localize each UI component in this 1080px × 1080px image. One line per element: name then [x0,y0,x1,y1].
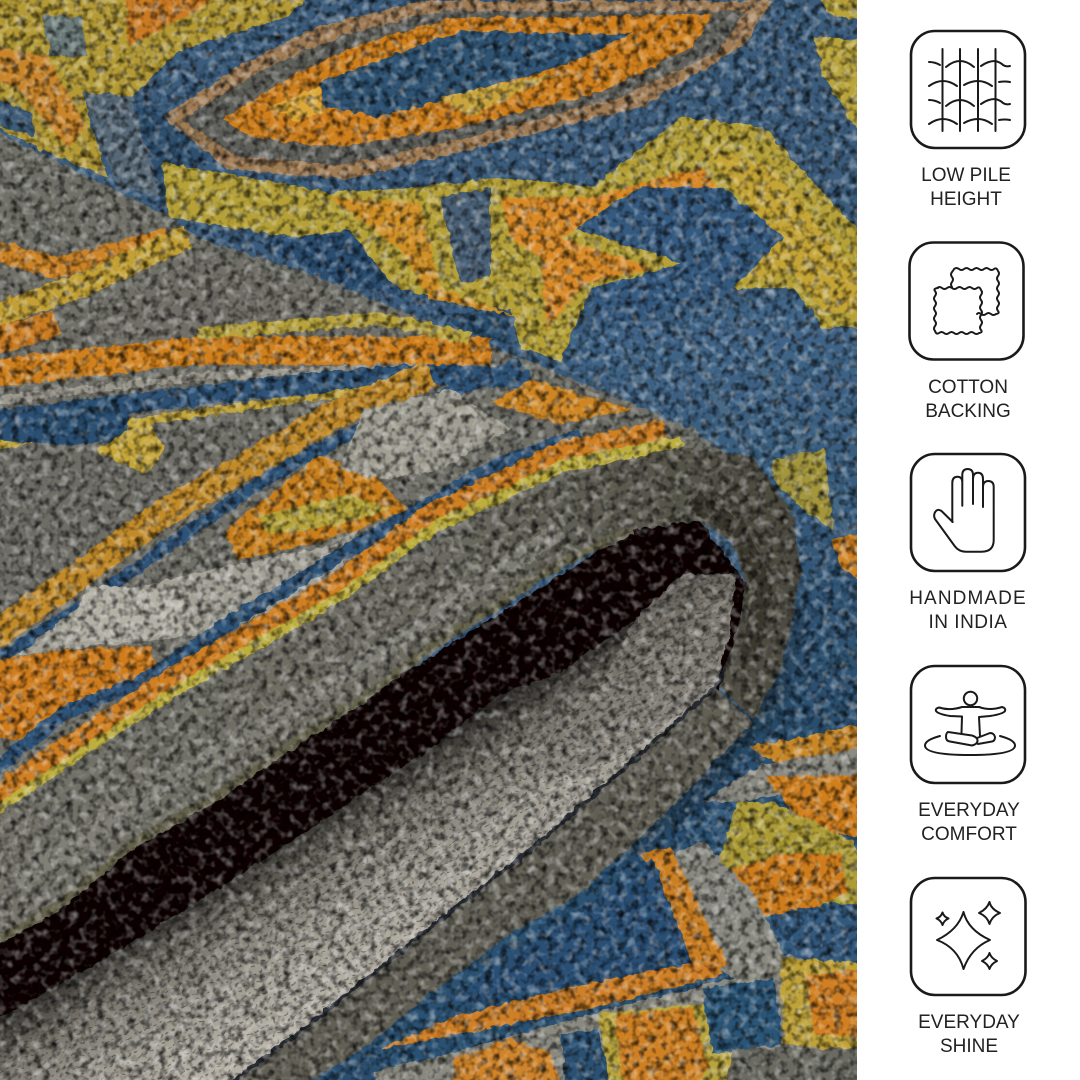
icon column [908,30,1027,996]
label: cotton backing [925,377,1011,422]
yarn grain texture [0,0,861,1080]
central yellow motif [163,117,874,361]
label: low pile height [921,165,1011,210]
folded rug top surface [0,127,748,862]
label: everyday shine: SHINE [940,1036,998,1057]
label: cotton backing: COTTON [928,377,1008,398]
icon: cotton backing [910,242,1024,360]
photo: folded rug close-up [0,0,857,1080]
label: handmade in india [909,588,1027,633]
label: everyday comfort: EVERYDAY [918,800,1020,821]
label: everyday comfort [918,800,1020,845]
top right yellow patches [814,36,874,157]
icon: everyday comfort yoga [911,666,1025,783]
label: cotton backing: BACKING [925,401,1011,422]
label: everyday shine [918,1012,1020,1057]
medallion [163,1,773,179]
dark shadow under fold [0,521,746,1080]
label: low pile height: LOW PILE [921,165,1011,186]
icon: everyday shine sparkles [911,878,1026,995]
label: low pile height: HEIGHT [930,189,1002,210]
label: handmade in india: HANDMADE [909,588,1027,609]
top left yellow motif [0,0,319,177]
icon: handmade hand [911,454,1025,571]
lower right rug section [299,721,874,1080]
shadow on rug beside the roll [622,600,793,852]
diagonal border stripes [0,364,521,658]
icon: low pile height [911,31,1025,148]
cream cotton backing [0,574,736,1080]
label: handmade in india: IN INDIA [929,612,1007,633]
label: everyday comfort: COMFORT [921,824,1017,845]
lower edge binding [208,687,753,1080]
fold binding roll [0,447,801,948]
label: everyday shine: EVERYDAY [918,1012,1020,1033]
